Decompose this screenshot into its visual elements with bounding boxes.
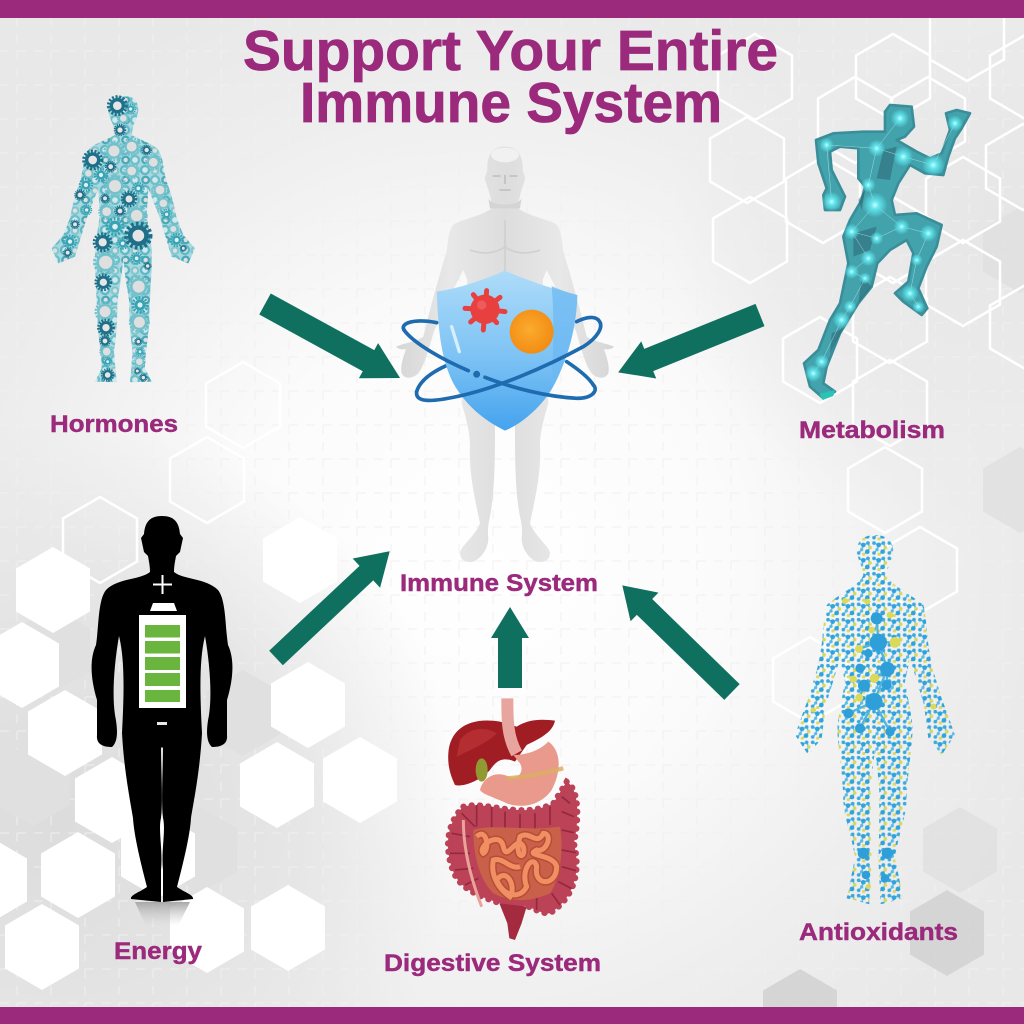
stomach — [480, 742, 559, 806]
arrow: digestive system to immune system — [491, 607, 529, 688]
silhouette — [92, 516, 232, 902]
gallbladder — [476, 758, 488, 782]
orbit rings behind shield — [403, 317, 598, 392]
esophagus — [507, 698, 517, 753]
icon: virus — [465, 291, 505, 330]
figure: energy silhouette with battery — [92, 516, 232, 926]
figure: antioxidants body made of molecules — [796, 535, 955, 904]
top bar — [0, 0, 1024, 18]
title: Immune System — [300, 71, 722, 135]
icon: orange cell — [510, 310, 554, 354]
label: Immune System: Immune System — [400, 570, 598, 597]
label: Energy: Energy — [114, 938, 203, 965]
battery — [139, 575, 186, 725]
figure: hormones body made of gears — [52, 95, 195, 382]
pancreas — [495, 795, 503, 798]
arrow: antioxidants to immune system — [608, 571, 746, 706]
label: Digestive System: Digestive System — [384, 950, 601, 977]
orbit rings front — [404, 320, 601, 400]
reflection — [135, 902, 190, 926]
label: Hormones: Hormones — [50, 411, 178, 438]
figure: central body with shield — [396, 147, 614, 562]
arrow: hormones to immune system — [255, 286, 410, 395]
arrow: energy to immune system — [262, 537, 403, 673]
label: Metabolism: Metabolism — [799, 417, 945, 444]
title — [243, 19, 778, 135]
arrow: metabolism to immune system — [611, 296, 767, 391]
small intestine — [473, 827, 562, 900]
bottom bar — [0, 1007, 1024, 1024]
figure: metabolism runner — [804, 105, 970, 400]
shield — [437, 271, 577, 431]
colon — [448, 782, 577, 913]
body — [396, 147, 614, 562]
figure: digestive system — [448, 698, 577, 940]
label: Antioxidants: Antioxidants — [799, 919, 958, 946]
liver — [448, 720, 555, 785]
title: Support Your Entire — [243, 19, 778, 83]
